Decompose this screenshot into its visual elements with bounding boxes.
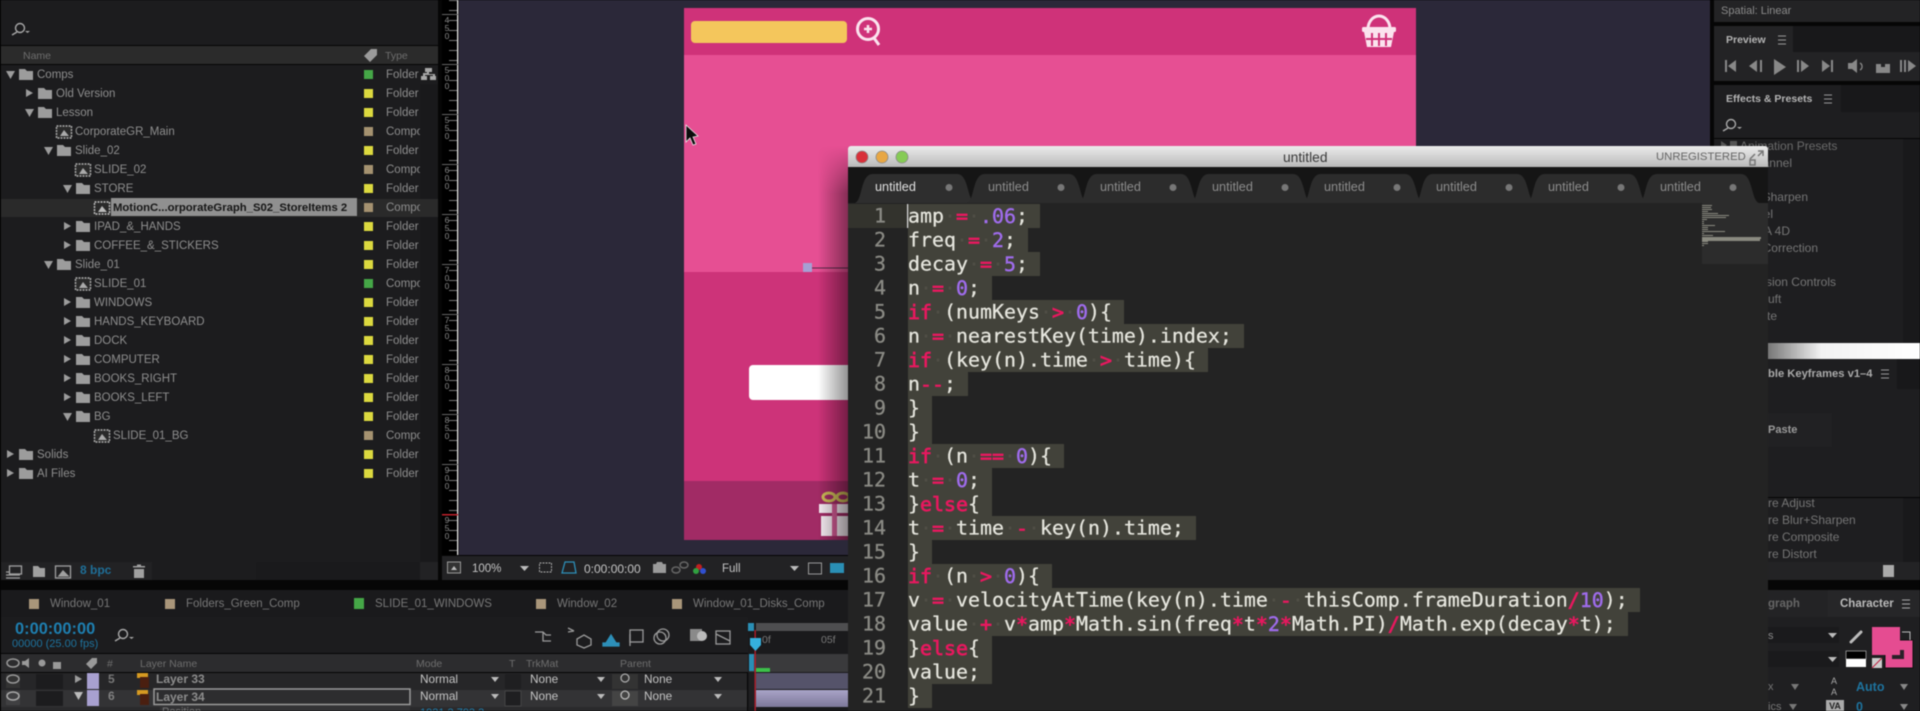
timeline tabs: Window_01 [50, 598, 110, 610]
tab 4 [1191, 174, 1311, 203]
title bar: untitled [1283, 150, 1328, 165]
timeline tabs: Window_01_Disks_Comp [693, 598, 825, 610]
icon: flowchart [421, 68, 436, 80]
layer row 6: None [644, 689, 673, 703]
row: BG: BG [94, 411, 111, 423]
tab 7: untitled [1548, 180, 1589, 194]
ruler labels: 0 [445, 173, 450, 183]
ruler labels: 0 [445, 81, 450, 91]
row: IPAD_&_HANDS [64, 221, 373, 233]
row: SLIDE_02 [76, 164, 373, 176]
type column: Folder [386, 221, 419, 233]
expression code: t·=·0; [908, 468, 980, 492]
panel: character [1714, 590, 1920, 711]
row: AI Files: AI Files [37, 468, 76, 480]
white panel edge [1768, 343, 1920, 359]
line numbers: 8 [874, 372, 886, 396]
line numbers [862, 204, 886, 708]
icon: show snapshot [672, 562, 688, 573]
tab 2: untitled [988, 180, 1029, 194]
type column: Folder [386, 69, 419, 81]
tab 1: untitled [875, 180, 916, 194]
ruler labels: 9 [445, 515, 450, 525]
row: SLIDE_01 [76, 278, 373, 290]
info panel text: Spatial: Linear [1721, 5, 1792, 17]
panel: effects and presets [1714, 85, 1920, 343]
row: SLIDE_02: SLIDE_02 [94, 164, 146, 176]
panel: character: graph [1768, 598, 1800, 610]
ruler labels: 5 [445, 23, 450, 33]
effects list: Blur & Sharpen [1727, 190, 1808, 204]
line numbers: 12 [862, 468, 886, 492]
effects list [1721, 139, 1837, 323]
expression code [908, 204, 1628, 708]
row: HANDS_KEYBOARD [64, 316, 373, 328]
tab 2 [967, 174, 1087, 203]
panel: lower effects list: re Blur+Sharpen [1768, 513, 1856, 527]
icon: new folder [33, 566, 45, 577]
expression code: if·(n·==·0){ [908, 444, 1052, 468]
icons: grid and mask [540, 562, 576, 573]
icon: always preview [448, 562, 460, 573]
ruler labels: 5 [445, 223, 450, 233]
ruler labels: 0 [445, 73, 450, 83]
panel: lower effects list: re Adjust [1768, 496, 1815, 510]
row: SLIDE_01_BG: SLIDE_01_BG [113, 430, 188, 442]
layer row 6 [1, 689, 748, 707]
line numbers: 17 [862, 588, 886, 612]
layer row 5: None [644, 672, 673, 686]
colour swatches [1846, 627, 1913, 668]
ruler labels: 0 [445, 131, 450, 141]
tab 4: untitled [1212, 180, 1253, 194]
tab 5 [1303, 174, 1423, 203]
line numbers: 21 [862, 684, 886, 708]
ruler labels: 0 [445, 281, 450, 291]
icon: channels [693, 564, 706, 574]
expression code: n·=·nearestKey(time).index; [908, 324, 1232, 348]
effects list: Channel [1728, 207, 1773, 221]
row: BG [63, 411, 373, 423]
type column: Composition [386, 202, 450, 214]
expression code: if·(numKeys·>·0){ [908, 300, 1112, 324]
row: SLIDE_01: SLIDE_01 [94, 278, 146, 290]
line numbers: 9 [874, 396, 886, 420]
ruler labels: 7 [445, 315, 450, 325]
panel: keyframes: Paste [1768, 424, 1797, 436]
tab 3 [1079, 174, 1199, 203]
project rows [6, 69, 373, 480]
expression code: }else{ [908, 636, 980, 660]
time markers: 0f [762, 634, 771, 646]
icon: gift [819, 493, 859, 536]
layer column header [1, 653, 861, 673]
ruler labels: 0 [445, 31, 450, 41]
row: Old Version: Old Version [56, 88, 115, 100]
title bar: UNREGISTERED [1656, 151, 1746, 163]
expression code: amp·=·.06; [908, 204, 1028, 228]
icon: trash [133, 564, 145, 578]
tab 8 [1639, 174, 1759, 203]
ruler labels: 6 [445, 215, 450, 225]
ruler labels: 5 [445, 65, 450, 75]
panel: keyframes: ble Keyframes v1–4 [1768, 368, 1873, 380]
icon: camera [653, 562, 666, 573]
layer column header: # [107, 658, 113, 670]
type column: Folder [386, 145, 419, 157]
layer column header: Layer Name [140, 658, 197, 670]
line numbers: 1 [874, 204, 886, 228]
effects list: Channel [1747, 156, 1792, 170]
project footer [1, 562, 438, 580]
effects list: Expression Controls [1729, 275, 1836, 289]
row: DOCK [64, 335, 373, 347]
icon: basket [1362, 16, 1396, 47]
layer column header: TrkMat [526, 658, 558, 670]
expression code: freq·=·2; [908, 228, 1016, 252]
expression code: } [908, 540, 920, 564]
search bar [691, 21, 847, 43]
icon: transparency grid [830, 563, 844, 573]
tab 1 [855, 174, 975, 203]
font dropdowns [1714, 627, 1839, 667]
expression code: } [908, 684, 920, 708]
bit depth: 8 bpc [80, 563, 112, 577]
row: COFFEE_&_STICKERS [64, 240, 373, 252]
row: Slide_01 [44, 259, 373, 271]
tab 6 [1415, 174, 1535, 203]
type column: Folder [386, 316, 419, 328]
font dropdowns: s [1768, 630, 1774, 642]
window shadow [818, 146, 848, 540]
expression code: } [908, 420, 920, 444]
row: Comps [6, 69, 373, 81]
line numbers: 14 [862, 516, 886, 540]
current time: 0:00:00:00 [15, 620, 95, 638]
ruler labels: 0 [445, 231, 450, 241]
row: BOOKS_RIGHT: BOOKS_RIGHT [94, 373, 177, 385]
effects list: Color Correction [1731, 241, 1818, 255]
panel: character: Character [1840, 598, 1894, 610]
ruler labels: 0 [445, 273, 450, 283]
icon: new composition [56, 566, 70, 578]
line numbers: 2 [874, 228, 886, 252]
effects list: Animation Presets [1740, 139, 1837, 153]
layer row 6: Layer 34 [156, 690, 205, 704]
row: STORE [63, 183, 373, 195]
row: BOOKS_LEFT [64, 392, 373, 404]
row: Lesson: Lesson [56, 107, 93, 119]
ruler labels: 0 [445, 473, 450, 483]
current time: 00000 (25.00 fps) [12, 638, 98, 650]
row: WINDOWS: WINDOWS [94, 297, 152, 309]
white button [749, 365, 859, 400]
type column: Folder [386, 183, 419, 195]
viewer time: 0:00:00:00 [584, 562, 641, 576]
type column: Composition [386, 430, 450, 442]
ruler labels: 7 [445, 265, 450, 275]
expression code: }else{ [908, 492, 980, 516]
panel: effects and presets: Effects & Presets [1726, 93, 1813, 105]
type column: Folder [386, 335, 419, 347]
leading and tracking: VA [1829, 701, 1841, 711]
ruler labels: 8 [445, 415, 450, 425]
timeline tabs: Folders_Green_Comp [186, 598, 300, 610]
selected row highlight [1, 198, 438, 217]
tab 7 [1527, 174, 1647, 203]
row: SLIDE_01_BG [94, 430, 373, 442]
row: Comps: Comps [37, 69, 74, 81]
icon: region [808, 563, 822, 574]
line numbers: 10 [862, 420, 886, 444]
icon: effects search [1723, 120, 1742, 131]
ruler labels: 0 [445, 531, 450, 541]
panel: timeline [1, 590, 861, 711]
row: Slide_02 [44, 145, 373, 157]
layer column header: Parent [620, 658, 651, 670]
ruler labels: 6 [445, 165, 450, 175]
tab 8: untitled [1660, 180, 1701, 194]
title bar [848, 146, 1768, 167]
icon: timeline search [115, 630, 134, 641]
timeline tabs: Window_02 [557, 598, 617, 610]
line numbers: 18 [862, 612, 886, 636]
expression code: } [908, 396, 920, 420]
tab strip [848, 167, 1768, 203]
icon: new item [1883, 565, 1894, 577]
traffic light buttons [856, 151, 908, 163]
type column: Folder [386, 240, 419, 252]
line numbers: 16 [862, 564, 886, 588]
ruler labels: 5 [445, 423, 450, 433]
viewer footer [442, 555, 862, 580]
row: Slide_02: Slide_02 [75, 145, 120, 157]
ruler labels: 5 [445, 323, 450, 333]
leading and tracking: Auto [1856, 680, 1885, 694]
ruler labels: 0 [445, 331, 450, 341]
layer row 5: Layer 33 [156, 672, 205, 686]
ruler labels: 4 [445, 15, 450, 25]
icon: eyedropper [1851, 632, 1861, 642]
type column: Folder [386, 297, 419, 309]
expression code: n·=·0; [908, 276, 980, 300]
ruler labels: 5 [445, 523, 450, 533]
leading and tracking: A [1831, 676, 1837, 686]
panel: preview: Preview [1726, 34, 1767, 46]
leading and tracking: A [1831, 687, 1837, 697]
ruler labels: 0 [445, 431, 450, 441]
type column [386, 68, 420, 478]
project column header: Type [385, 50, 408, 62]
line numbers: 20 [862, 660, 886, 684]
active line gutter [848, 204, 908, 228]
expression code: if·(key(n).time·>·time){ [908, 348, 1196, 372]
layer row 6: None [530, 689, 559, 703]
magnification: 100% [472, 563, 501, 575]
row: Solids [7, 449, 373, 461]
layer column header: Mode [416, 658, 442, 670]
row: HANDS_KEYBOARD: HANDS_KEYBOARD [94, 316, 205, 328]
row: WINDOWS [64, 297, 373, 309]
line numbers: 5 [874, 300, 886, 324]
selection highlight [908, 204, 1640, 708]
panel: keyframes [1714, 359, 1920, 497]
line numbers: 3 [874, 252, 886, 276]
resolution: Full [722, 563, 741, 575]
row: AI Files [7, 468, 373, 480]
line numbers: 19 [862, 636, 886, 660]
panel: preview [1714, 26, 1920, 81]
row: BOOKS_RIGHT [64, 373, 373, 385]
type column: Folder [386, 373, 419, 385]
icon: interpret footage [6, 566, 22, 578]
type column: Folder [386, 88, 419, 100]
playback controls [1725, 59, 1916, 75]
ruler labels: 5 [445, 115, 450, 125]
type column: Folder [386, 392, 419, 404]
row: Lesson [25, 107, 373, 119]
type column: Folder [386, 259, 419, 271]
ruler labels: 0 [445, 381, 450, 391]
effects list: uft [1768, 292, 1782, 306]
row: CorporateGR_Main: CorporateGR_Main [75, 126, 175, 138]
panel: lower effects list: re Distort [1768, 547, 1817, 561]
row: Slide_01: Slide_01 [75, 259, 120, 271]
leading and tracking [1768, 676, 1908, 711]
timeline tabs: SLIDE_01_WINDOWS [375, 598, 492, 610]
timeline tabs [1, 590, 861, 617]
project column header [1, 45, 438, 65]
effects list: CINEMA 4D [1725, 224, 1790, 238]
ruler labels [445, 15, 450, 541]
leading and tracking: x [1768, 681, 1774, 693]
panel: right side [1714, 0, 1920, 711]
anchor point [803, 263, 860, 272]
tab 3: untitled [1100, 180, 1141, 194]
icon: mouse cursor [686, 125, 698, 145]
type column: Folder [386, 354, 419, 366]
timeline ruler and layer bars: 05f [821, 634, 836, 646]
playhead [750, 638, 761, 651]
panel: lower effects list: re Composite [1768, 530, 1840, 544]
line numbers: 11 [862, 444, 886, 468]
layer row 5: None [530, 672, 559, 686]
row: CorporateGR_Main [56, 126, 373, 138]
layer row 5: Normal [420, 672, 458, 686]
tab 6: untitled [1436, 180, 1477, 194]
project column header: Name [23, 50, 51, 62]
row: BOOKS_LEFT: BOOKS_LEFT [94, 392, 169, 404]
row: STORE: STORE [94, 183, 134, 195]
minimap [1702, 203, 1768, 264]
row: DOCK: DOCK [94, 335, 128, 347]
expression code: if·(n·>·0){ [908, 564, 1040, 588]
ruler labels: 8 [445, 365, 450, 375]
layer row 6: Normal [420, 689, 458, 703]
row: COFFEE_&_STICKERS: COFFEE_&_STICKERS [94, 240, 219, 252]
property row [1, 706, 748, 711]
type column: Folder [386, 411, 419, 423]
expression code: t·=·time·-·key(n).time; [908, 516, 1184, 540]
row: COMPUTER [64, 354, 373, 366]
type column: Folder [386, 107, 419, 119]
ruler [442, 0, 458, 556]
expression code: n--; [908, 372, 956, 396]
ruler labels: 5 [445, 123, 450, 133]
expression code: decay·=·5; [908, 252, 1028, 276]
row: IPAD_&_HANDS: IPAD_&_HANDS [94, 221, 181, 233]
type column: Folder [386, 468, 419, 480]
timeline tool icons [535, 628, 730, 648]
line numbers: 7 [874, 348, 886, 372]
row: selected composition: MotionC...orporateGraph_S02_StoreItems 2 [113, 202, 347, 214]
line numbers: 6 [874, 324, 886, 348]
line numbers: 15 [862, 540, 886, 564]
row: Solids: Solids [37, 449, 69, 461]
row: Old Version [26, 88, 373, 100]
current time [12, 620, 98, 650]
icon: project search [12, 24, 30, 35]
row: COMPUTER: COMPUTER [94, 354, 160, 366]
ruler labels: 0 [445, 481, 450, 491]
tab 5: untitled [1324, 180, 1365, 194]
layer column header: T [509, 658, 516, 670]
editor body [848, 167, 1768, 711]
type column: Composition [386, 278, 450, 290]
ruler labels: 0 [445, 373, 450, 383]
expression code: value·+·v*amp*Math.sin(freq*t*2*Math.PI)/Math.exp(decay*t); [908, 612, 1616, 636]
caret [907, 204, 908, 228]
panel: code editor window [848, 146, 1768, 711]
layer row 5 [1, 672, 748, 690]
layer row 5: 5 [108, 672, 115, 686]
line numbers: 13 [862, 492, 886, 516]
panel: composition viewer [442, 0, 1710, 580]
ruler labels: 0 [445, 181, 450, 191]
expression code: v·=·velocityAtTime(key(n).time·-·thisComp.frameDuration/10); [908, 588, 1628, 612]
expression code: value; [908, 660, 980, 684]
panel: lower effects list [1714, 496, 1920, 580]
line numbers: 4 [874, 276, 886, 300]
layer row 6: 6 [108, 689, 115, 703]
type column: Composition [386, 164, 450, 176]
type column: Folder [386, 449, 419, 461]
effects list: Generate [1727, 309, 1777, 323]
panel: project [1, 0, 450, 580]
type column: Composition [386, 126, 450, 138]
pink store design [684, 8, 1416, 540]
timeline ruler and layer bars [747, 617, 861, 711]
ruler labels: 9 [445, 465, 450, 475]
icon: magnifier [858, 18, 879, 45]
icon: fullscreen [1750, 151, 1763, 165]
